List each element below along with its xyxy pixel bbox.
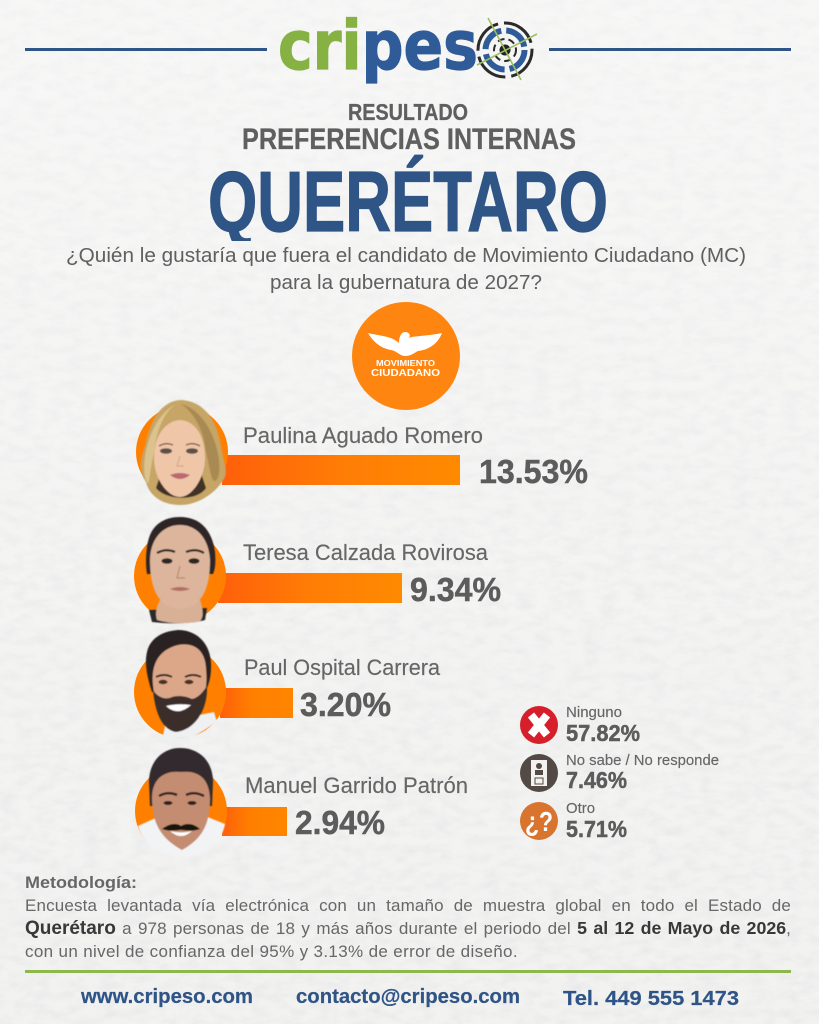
methodology text: Encuesta levantada vía electrónica con un tamaño de muestra global en todo el Estado de xyxy=(25,896,791,915)
legend: Otro: Otro xyxy=(566,800,595,817)
name: Paulina Aguado Romero xyxy=(243,423,483,448)
legend: Ninguno: 57.82% xyxy=(566,720,640,746)
footer contact: contacto@cripeso.com xyxy=(296,985,520,1008)
value: 9.34% xyxy=(410,571,501,608)
portrait: Teresa xyxy=(134,517,226,623)
value: 13.53% xyxy=(479,453,588,490)
logo: cripeso xyxy=(278,7,537,86)
bar xyxy=(220,688,293,718)
header rule left xyxy=(25,48,267,51)
footer contact xyxy=(80,985,739,1010)
methodology text: con un nivel de confianza del 95% y 3.13% de error de diseño. xyxy=(25,942,518,961)
legend: No sabe / No responde: 7.46% xyxy=(566,767,627,793)
heading: preferencias internas: PREFERENCIAS INTERNAS xyxy=(242,123,576,156)
bar xyxy=(222,455,460,485)
portrait: Manuel xyxy=(135,748,227,858)
candidate row: Manuel Garrido Patrón xyxy=(135,748,468,858)
candidate row: Teresa Calzada Rovirosa xyxy=(134,517,501,623)
heading: resultado: RESULTADO xyxy=(348,99,468,125)
name: Manuel Garrido Patrón xyxy=(245,773,468,798)
methodology text: Querétaro a 978 personas de 18 y más años durante el periodo del 5 al 12 de Mayo de 2026, xyxy=(25,918,791,939)
footer rule xyxy=(25,970,791,973)
party logo: Movimiento Ciudadano: CIUDADANO xyxy=(371,367,440,379)
legend: Otro xyxy=(520,800,627,842)
header rule right xyxy=(549,48,791,51)
question text xyxy=(66,245,746,294)
portrait: Paul xyxy=(134,630,226,739)
name: Paul Ospital Carrera xyxy=(244,655,441,680)
portrait: Paulina xyxy=(136,400,228,505)
bar xyxy=(218,573,402,603)
icon: ballot xyxy=(520,754,558,792)
logo wordmark: cripes xyxy=(278,7,478,86)
icon: question marks: ¿? xyxy=(525,806,553,837)
party logo: Movimiento Ciudadano xyxy=(352,302,460,410)
value: 2.94% xyxy=(295,804,385,841)
candidate row: Paulina Aguado Romero xyxy=(136,400,588,505)
party logo: Movimiento Ciudadano: MOVIMIENTO xyxy=(376,359,435,368)
icon: red X xyxy=(520,706,558,744)
legend: Otro: 5.71% xyxy=(566,816,627,842)
name: Teresa Calzada Rovirosa xyxy=(243,540,489,565)
methodology text xyxy=(25,896,791,961)
methodology heading: Metodología: xyxy=(25,873,137,892)
value: 3.20% xyxy=(300,686,391,723)
question text: ¿Quién le gustaría que fuera el candidato de Movimiento Ciudadano (MC) xyxy=(66,245,746,267)
question text: para la gubernatura de 2027? xyxy=(270,272,542,294)
legend: No sabe / No responde: No sabe / No responde xyxy=(566,752,719,769)
candidate row: Paul Ospital Carrera xyxy=(134,630,441,739)
eagle emblem xyxy=(368,332,442,356)
legend: Ninguno xyxy=(520,704,640,746)
bar xyxy=(222,807,287,836)
logo target icon xyxy=(477,18,537,80)
title: Querétaro: QUERÉTARO xyxy=(208,155,608,250)
legend: Ninguno: Ninguno xyxy=(566,704,622,721)
footer contact: Tel. 449 555 1473 xyxy=(563,987,739,1010)
legend: No sabe / No responde xyxy=(520,752,719,793)
footer contact: www.cripeso.com xyxy=(80,985,253,1008)
